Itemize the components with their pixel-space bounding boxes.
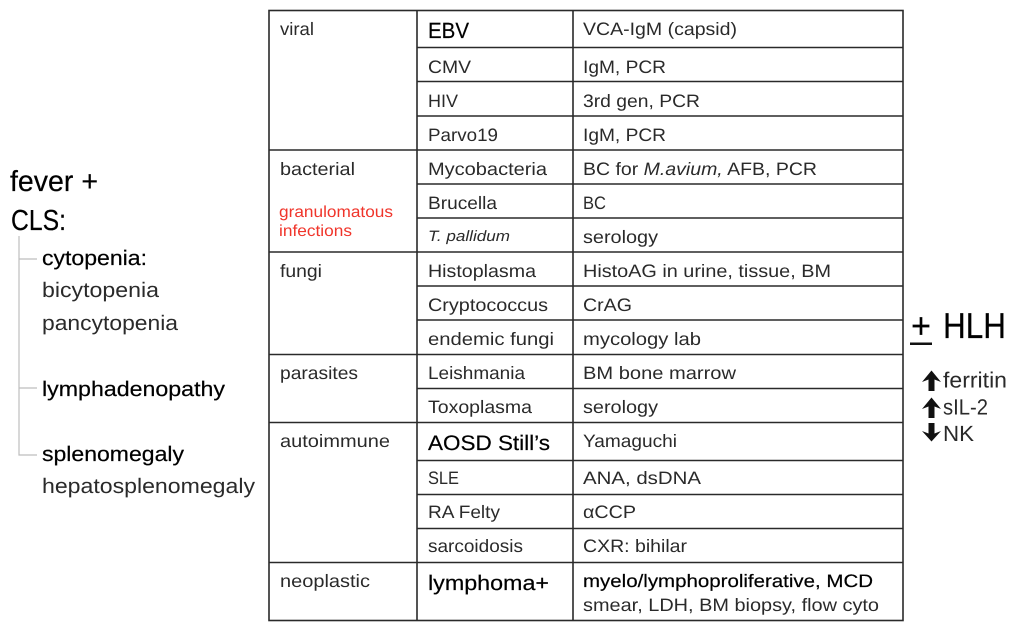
finding: splenomegaly: splenomegaly: [42, 443, 185, 466]
marker: ferritin up: ferritin: [943, 368, 1007, 392]
category column: neoplastic: [280, 571, 370, 591]
finding: cytopenia: [42, 247, 178, 335]
tree connector: [19, 236, 37, 455]
right panel: HLH markers: [910, 305, 1007, 446]
marker: sIL-2 up: [922, 394, 988, 420]
test column: Yamaguchi: [583, 431, 677, 451]
pathogen / disease column: Parvo19: [428, 125, 498, 145]
test column: VCA-IgM (capsid): [583, 19, 737, 39]
finding: cytopenia: bicytopenia: [42, 279, 159, 302]
pathogen / disease column: Mycobacteria: [428, 159, 548, 179]
marker: NK down: NK: [943, 421, 974, 446]
pathogen / disease column: sarcoidosis: [428, 536, 523, 556]
finding: cytopenia: cytopenia:: [42, 247, 147, 270]
test column: IgM, PCR: [583, 57, 666, 77]
test column: ANA, dsDNA: [583, 468, 701, 488]
test column: IgM, PCR: [583, 125, 666, 145]
test column: BM bone marrow: [583, 363, 737, 383]
heading: plus-minus HLH: HLH: [943, 305, 1006, 346]
marker: sIL-2 up: sIL-2: [943, 394, 988, 420]
test column: 3rd gen, PCR: [583, 91, 700, 111]
left panel: fever + CLS findings: [10, 166, 256, 498]
pathogen / disease column: [428, 18, 554, 595]
category column: fungi: [280, 261, 322, 281]
pathogen / disease column: Cryptococcus: [428, 295, 548, 315]
marker: NK down: [922, 421, 974, 446]
test column: [583, 19, 879, 615]
test column: mycology lab: [583, 329, 701, 349]
pathogen / disease column: AOSD Still’s: [428, 432, 550, 455]
test column: BC for M.avium, AFB, PCR: [583, 159, 817, 179]
heading: plus-minus HLH: [910, 305, 1006, 346]
category column: autoimmune: [280, 431, 390, 451]
test column: BC: [583, 193, 606, 213]
heading: CLS: CLS:: [11, 205, 66, 237]
pathogen / disease column: EBV: [428, 18, 469, 43]
test column: CrAG: [583, 295, 632, 315]
finding: lymphadenopathy: lymphadenopathy: [42, 378, 226, 401]
test column: HistoAG in urine, tissue, BM: [583, 261, 831, 281]
finding: cytopenia: pancytopenia: [42, 312, 178, 335]
pathogen / disease column: T. pallidum: [428, 228, 510, 245]
category column: viral: [280, 19, 314, 39]
category column: granulomatous: [279, 204, 393, 221]
test column: smear, LDH, BM biopsy, flow cyto: [583, 595, 879, 615]
pathogen / disease column: lymphoma+: [428, 572, 549, 595]
pathogen / disease column: RA Felty: [428, 502, 500, 522]
category column: [279, 19, 393, 591]
category column: bacterial: [280, 159, 355, 179]
test column: serology: [583, 397, 658, 417]
category column: parasites: [280, 363, 358, 383]
heading: plus-minus HLH: +: [911, 305, 931, 346]
pathogen / disease column: HIV: [428, 91, 458, 111]
test column: serology: [583, 227, 658, 247]
pathogen / disease column: Leishmania: [428, 363, 526, 383]
test column: myelo/lymphoproliferative, MCD: [583, 571, 873, 591]
pathogen / disease column: Toxoplasma: [428, 397, 533, 417]
finding: splenomegaly: hepatosplenomegaly: [42, 475, 256, 498]
finding: splenomegaly: [42, 443, 256, 498]
test column: CXR: bihilar: [583, 536, 687, 556]
pathogen / disease column: endemic fungi: [428, 329, 554, 349]
test column: αCCP: [583, 502, 636, 522]
pathogen / disease column: SLE: [428, 468, 459, 488]
heading: fever +: fever +: [10, 166, 98, 198]
table: differential diagnosis and tests: [269, 10, 903, 620]
pathogen / disease column: CMV: [428, 57, 471, 77]
pathogen / disease column: Histoplasma: [428, 261, 537, 281]
pathogen / disease column: Brucella: [428, 193, 498, 213]
category column: infections: [279, 223, 352, 240]
